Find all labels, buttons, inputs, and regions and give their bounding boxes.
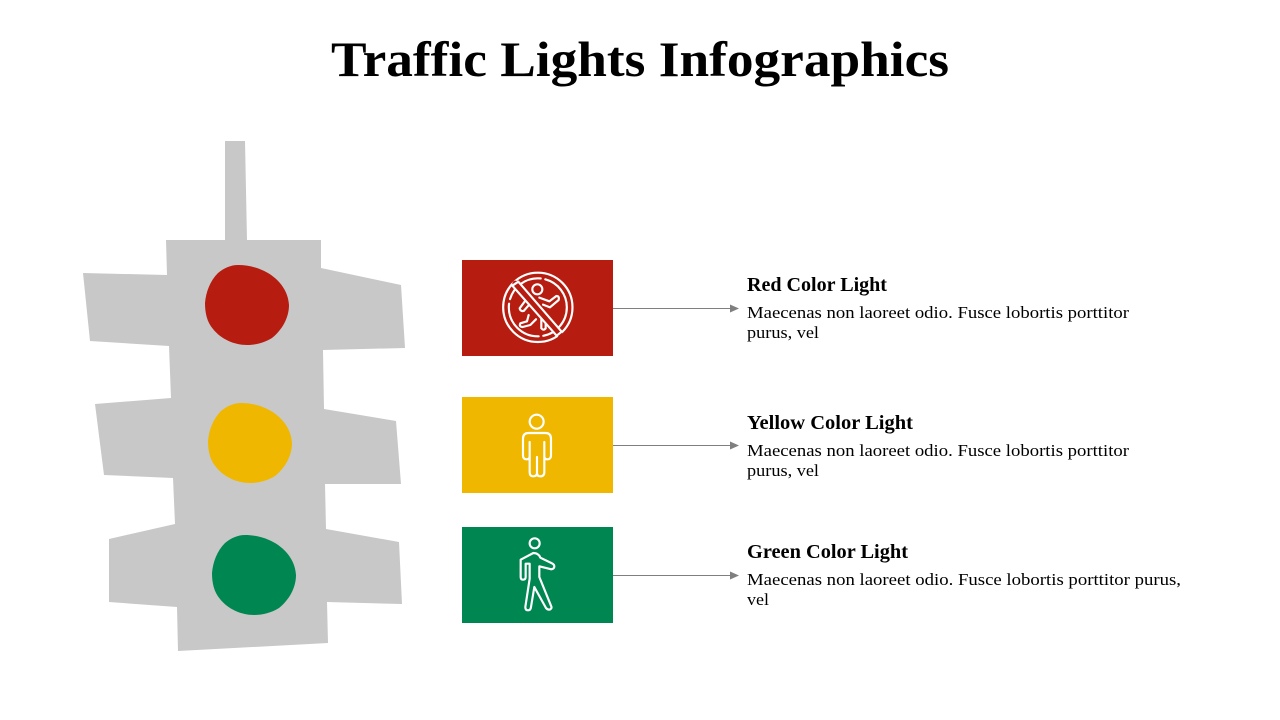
text block: red: Red Color Light (747, 274, 887, 296)
icon: walking person (521, 538, 554, 610)
red icon box (462, 260, 613, 356)
green lamp (212, 535, 296, 615)
text block: red: Maecenas non laoreet odio. Fusce lobortis porttitor (747, 303, 1130, 322)
text block: yellow: purus, vel (747, 461, 819, 480)
text block: green: vel (747, 590, 769, 609)
traffic light (83, 141, 405, 651)
title: Traffic Lights Infographics (331, 31, 949, 87)
text block: yellow (747, 412, 1130, 480)
text block: green (747, 541, 1181, 609)
red lamp (205, 265, 289, 345)
text block: yellow: Yellow Color Light (747, 412, 913, 434)
icon: no pedestrian crossing (503, 273, 572, 342)
green icon box (462, 527, 613, 623)
yellow icon box (462, 397, 613, 493)
arrow: red (613, 304, 739, 312)
text block: green: Maecenas non laoreet odio. Fusce lobortis porttitor purus, (747, 570, 1181, 589)
text block: red (747, 274, 1130, 342)
arrow: yellow (613, 442, 739, 450)
text block: red: purus, vel (747, 323, 819, 342)
icon: standing person (523, 415, 551, 476)
traffic light housing (83, 141, 405, 651)
text block: yellow: Maecenas non laoreet odio. Fusce lobortis porttitor (747, 441, 1130, 460)
text block: green: Green Color Light (747, 541, 908, 563)
yellow lamp (208, 403, 292, 483)
arrow: green (613, 572, 739, 580)
